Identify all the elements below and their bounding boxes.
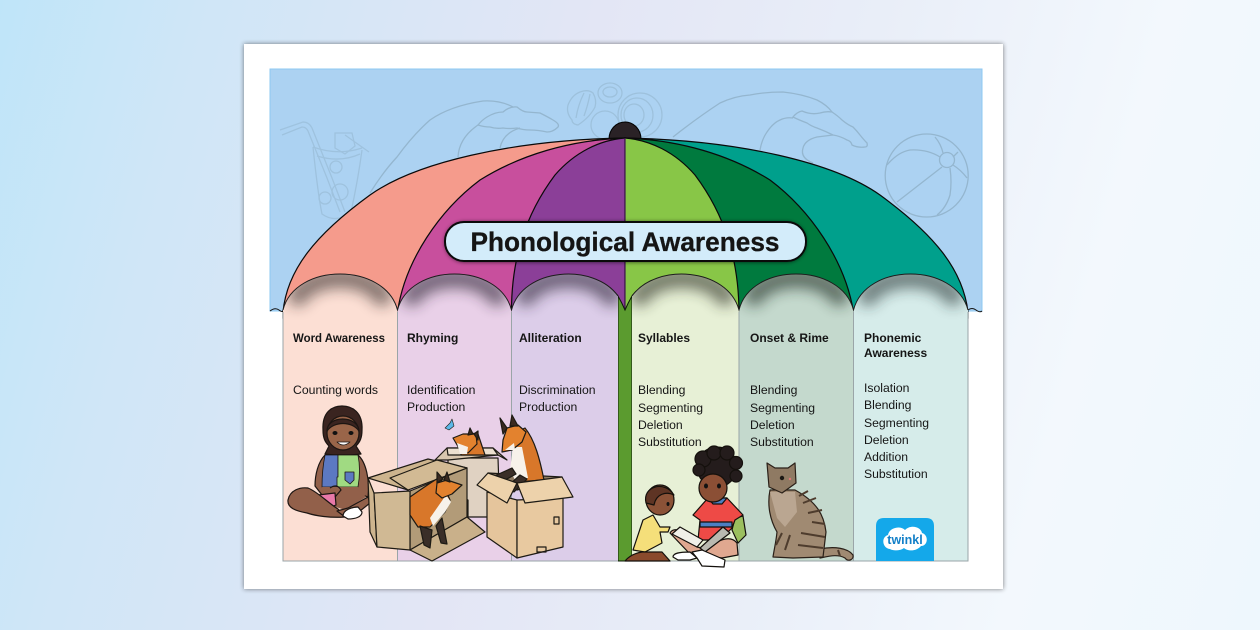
text: Phonemic Awareness: Segmenting [864, 416, 929, 430]
text: Onset and Rime: Deletion [750, 418, 795, 432]
box: front open box [368, 459, 485, 561]
doodle: drink glass [280, 122, 369, 219]
box: back open box [435, 448, 507, 517]
text: Rhyming: Identification [407, 383, 475, 397]
canopy: lime panel [625, 138, 739, 318]
text: Alliteration [519, 331, 596, 414]
canopy: teal panel [625, 138, 968, 318]
canopy: dark green panel [625, 138, 854, 318]
logo: twinkl: twinkl [887, 533, 923, 547]
doodle: beach ball [885, 134, 968, 217]
text: Phonemic Awareness: Substitution [864, 467, 928, 481]
older child [670, 446, 746, 567]
canopy: salmon panel [283, 138, 625, 318]
text: Phonemic Awareness: Isolation [864, 381, 909, 395]
text: Phonemic Awareness: Deletion [864, 433, 909, 447]
text: Phonemic Awareness [864, 331, 929, 481]
illustration: girl sitting [288, 406, 370, 519]
column: Syllables [632, 274, 739, 560]
text: Alliteration: Discrimination [519, 383, 596, 397]
text: Onset and Rime: Segmenting [750, 401, 815, 415]
text: Syllables [638, 331, 703, 449]
fox: in back box [453, 428, 485, 455]
title banner: Phonological Awareness [470, 227, 780, 257]
text: Phonemic Awareness: Blending [864, 398, 911, 412]
canopy: magenta panel [398, 138, 625, 318]
panel: sky background [270, 69, 982, 311]
text: Word Awareness: Counting words [293, 383, 378, 397]
text: Onset and Rime: Onset & Rime [750, 331, 829, 345]
text: Phonemic Awareness: Phonemic [864, 331, 922, 345]
icon: umbrella top knob [609, 122, 641, 139]
text: Phonemic Awareness: Awareness [864, 346, 927, 360]
text: Syllables: Substitution [638, 435, 702, 449]
icon: butterfly [445, 419, 454, 430]
doodle: right wave [673, 92, 867, 163]
column: Rhyming [398, 260, 512, 561]
text: Alliteration: Alliteration [519, 331, 582, 345]
doodle: shells [568, 83, 662, 139]
text: Word Awareness: Word Awareness [293, 331, 385, 345]
pole [618, 296, 632, 561]
text: Rhyming: Rhyming [407, 331, 458, 345]
doodle: left wave [370, 101, 558, 193]
wave edges of canopy [270, 308, 982, 312]
column outlines [283, 274, 968, 561]
text: Syllables: Deletion [638, 418, 683, 432]
column: Phonemic Awareness [854, 260, 968, 561]
beach doodles [280, 83, 968, 219]
column: Onset and Rime [739, 260, 854, 561]
centre seam [624, 138, 626, 310]
fox: in right box [490, 415, 544, 492]
small child [625, 485, 674, 561]
box: right box interior [488, 473, 562, 490]
column: Alliteration [512, 274, 618, 560]
text: Syllables: Syllables [638, 331, 690, 345]
illustration: children reading [625, 446, 746, 567]
title banner [445, 222, 806, 262]
illustration: cardboard boxes and foxes [368, 415, 573, 561]
text: Syllables: Segmenting [638, 401, 703, 415]
fox: in front box [410, 472, 462, 548]
sheet: white poster [244, 44, 1003, 589]
text: Onset and Rime: Substitution [750, 435, 814, 449]
column: Word Awareness [283, 260, 398, 561]
text: Rhyming [407, 331, 475, 414]
text: Onset and Rime [750, 331, 829, 449]
text: Rhyming: Production [407, 400, 465, 414]
illustration: tabby cat [767, 463, 853, 560]
text: Onset and Rime: Blending [750, 383, 797, 397]
text: Word Awareness [293, 331, 385, 397]
logo: twinkl [876, 518, 934, 561]
box: right box body [477, 473, 573, 558]
canopy: purple panel [511, 138, 625, 318]
text: Syllables: Blending [638, 383, 685, 397]
umbrella canopy [283, 138, 968, 318]
text: Phonemic Awareness: Addition [864, 450, 908, 464]
text: Alliteration: Production [519, 400, 577, 414]
